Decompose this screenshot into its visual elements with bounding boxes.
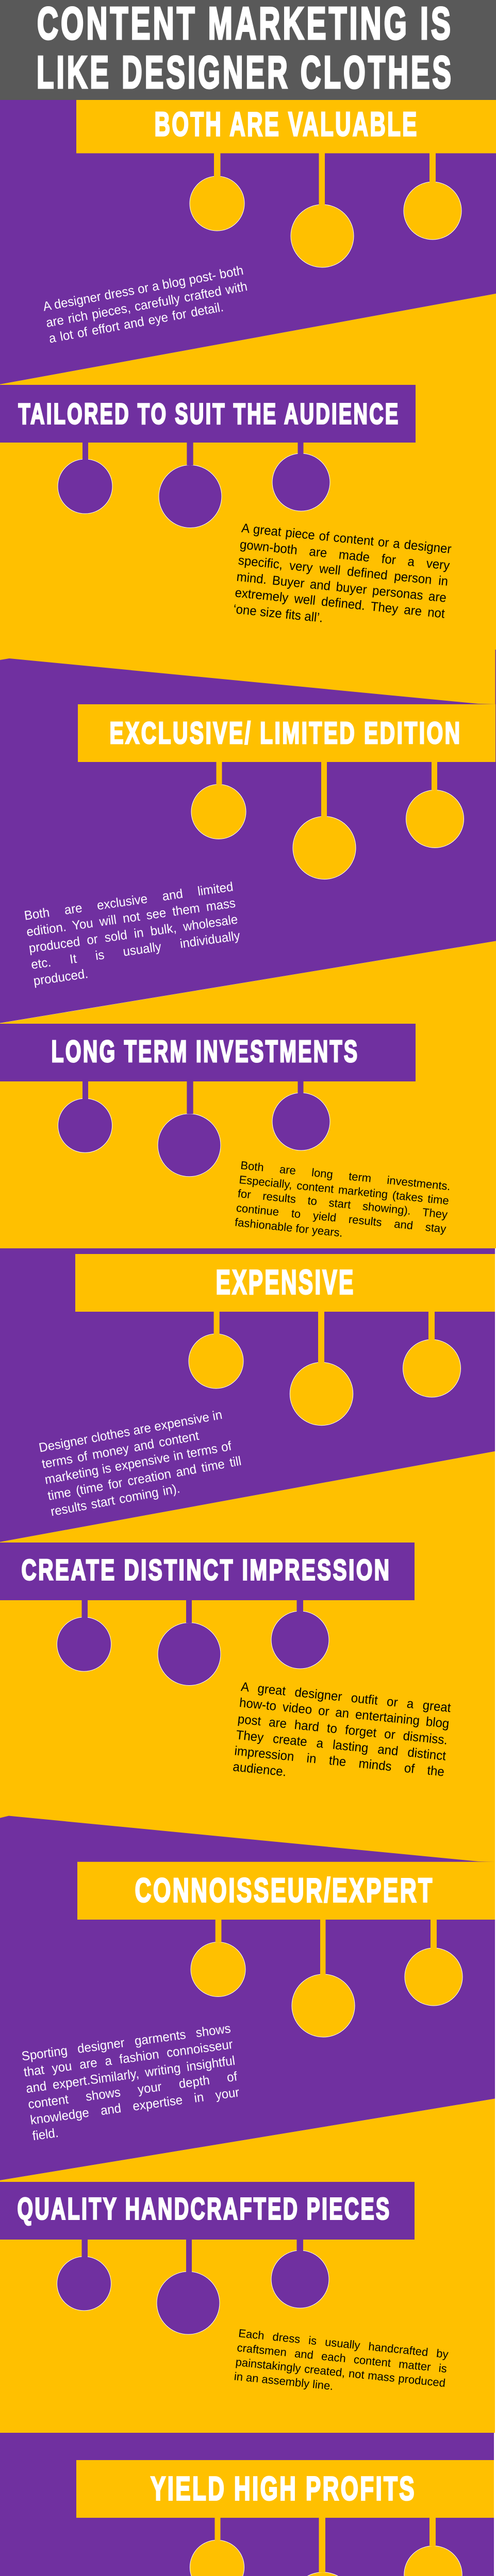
heading: both are valuable (76, 100, 496, 154)
heading: quality handcrafted pieces (0, 2182, 415, 2240)
text block: handcrafted (234, 2327, 449, 2393)
text block: both are valuable: are rich pieces, carefully crafted with (45, 279, 249, 330)
text block: expensive (38, 1408, 242, 1519)
text block: exclusive (23, 879, 241, 988)
icon: hanging circles (191, 1920, 462, 2037)
text block: long term: for results to start showing). They (237, 1187, 448, 1221)
text block: tailored: A great piece of content or a designer (241, 521, 452, 556)
title (37, 0, 454, 98)
text block: connoisseur: Sporting designer garments shows (21, 2021, 232, 2064)
text block: long term (234, 1159, 451, 1239)
text block: long term: Both are long term investments. (240, 1159, 451, 1193)
icon: hanging circles (189, 1312, 461, 1426)
icon: hanging circles (58, 443, 330, 528)
text block: exclusive: produced or sold in bulk, wholesale (28, 912, 239, 956)
heading: expensive: EXPENSIVE (216, 1263, 355, 1301)
icon: hanging circles (191, 762, 464, 879)
heading: expensive (75, 1254, 495, 1312)
text block: both are valuable: a lot of effort and eye for detail. (47, 300, 224, 346)
text block: long term: fashionable for years. (234, 1215, 343, 1239)
panel: section 3 exclusive limited edition (0, 650, 496, 1023)
text block: tailored: ‘one size fits all’. (233, 602, 324, 625)
text block: connoisseur: field. (31, 2126, 59, 2144)
panel: section 8 quality handcrafted pieces (0, 2099, 495, 2433)
text block: handcrafted: in an assembly line. (234, 2369, 334, 2393)
icon: hanging circles (57, 1600, 329, 1686)
panel: section 5 expensive (0, 1248, 495, 1542)
text block: connoisseur: that you are a fashion connoisseur (23, 2037, 234, 2080)
text block: exclusive: produced. (32, 967, 89, 988)
text block: exclusive: etc. It is usually individually (30, 928, 241, 972)
text block: tailored: gown-both are made for a very (239, 537, 451, 573)
text block: tailored: mind. Buyer and buyer personas are (236, 569, 448, 605)
text block: distinct impression: audience. (233, 1760, 287, 1780)
text block: handcrafted: Each dress is usually handcrafted by (238, 2327, 449, 2361)
text block: distinct impression: They create a lasting and distinct (236, 1727, 447, 1764)
heading: tailored to suit the audience (0, 385, 416, 443)
text block: distinct impression: post are hard to forget or dismiss. (237, 1711, 449, 1747)
text block: expensive: time (time for creation and time till (46, 1454, 242, 1503)
panel: section 7 connoisseur expert (0, 1816, 495, 2180)
text block: exclusive: edition. You will not see them mass (25, 896, 236, 939)
heading: exclusive limited edition (78, 704, 495, 762)
icon: hanging circles (190, 2518, 462, 2576)
icon: hanging circles (190, 153, 461, 267)
text block: handcrafted: painstakingly created, not mass produced (235, 2355, 446, 2389)
panel: section 9 yield high profits (0, 2433, 494, 2576)
icon: hanging circles (58, 1081, 330, 1177)
panel: section 1 both are valuable (0, 100, 496, 384)
text block: long term: continue to yield results and stay (236, 1201, 447, 1235)
text block: long term: Especially, content marketing (takes time (238, 1173, 450, 1207)
text block: exclusive: Both are exclusive and limited (23, 879, 234, 923)
text block: connoisseur: content shows your depth of (27, 2069, 238, 2112)
text block: distinct impression: A great designer outfit or a great (240, 1680, 452, 1715)
text block: expensive: Designer clothes are expensive in (38, 1408, 223, 1455)
text block: expensive: terms of money and content (41, 1429, 200, 1471)
text block: tailored (233, 521, 452, 625)
heading: create distinct impression (0, 1543, 415, 1600)
text block: connoisseur (21, 2021, 240, 2144)
text block: connoisseur: and expert.Similarly, writing insightful (25, 2053, 236, 2096)
panel: section 6 create distinct impression (0, 1451, 495, 1862)
text block: expensive: marketing is expensive in terms of (43, 1439, 233, 1487)
panel: section 4 long term investments (0, 941, 496, 1248)
text block: both are valuable: A designer dress or a blog post- both (42, 263, 244, 314)
heading: long term investments (0, 1024, 416, 1081)
text block: expensive: results start coming in). (49, 1481, 181, 1519)
text block: distinct impression (233, 1680, 452, 1780)
text block: distinct impression: impression in the minds of the (234, 1744, 445, 1780)
icon: hanging circles (57, 2240, 329, 2334)
heading: yield high profits (76, 2460, 494, 2518)
text block: tailored: specific, very well defined person in (238, 553, 449, 589)
text block: connoisseur: knowledge and expertise in your (29, 2085, 240, 2128)
text block: both are valuable (42, 263, 249, 346)
panel: section 2 tailored to suit the audience (0, 294, 496, 704)
text block: distinct impression: how-to video or an entertaining blog (239, 1696, 450, 1731)
heading: connoisseur expert (77, 1862, 495, 1920)
text block: handcrafted: craftsmen and each content matter is (237, 2341, 448, 2375)
text block: tailored: extremely well defined. They are not (235, 586, 445, 621)
title banner (0, 0, 496, 100)
